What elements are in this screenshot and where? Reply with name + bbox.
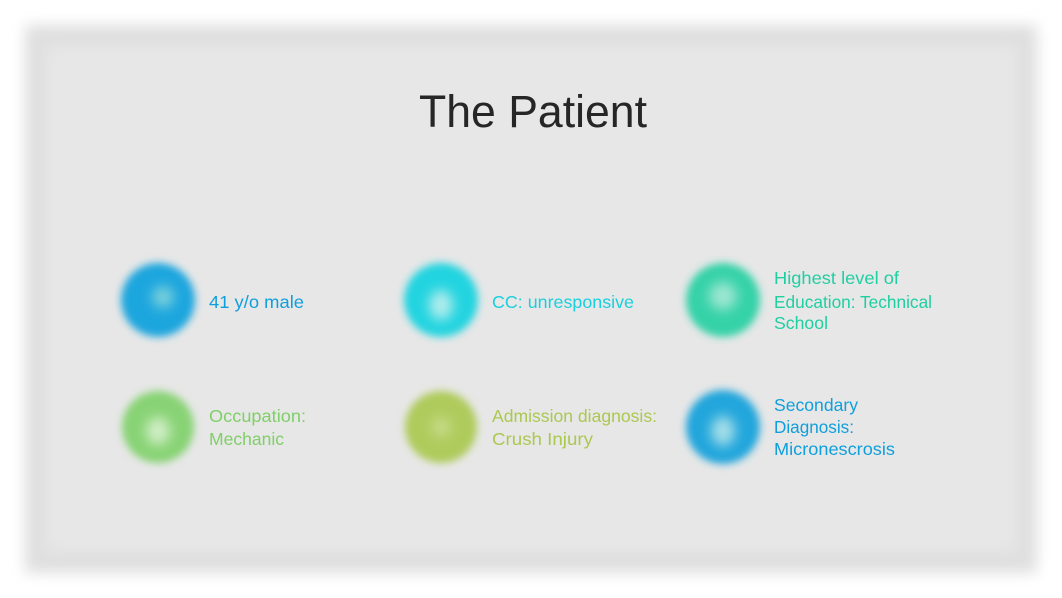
icon: teal circle (686, 263, 760, 337)
label: education text: Education: Technical (774, 292, 932, 312)
label: education text: Highest level of (774, 268, 899, 288)
label: occupation text: Mechanic (209, 429, 284, 449)
label: occupation text: Occupation: (209, 406, 306, 426)
item: chief complaint (404, 263, 634, 337)
item: admission diagnosis (405, 391, 657, 463)
label: occupation text (209, 406, 306, 449)
icon: green circle (122, 391, 194, 463)
label: CC unresponsive: CC: unresponsive (492, 292, 634, 312)
label: admission text: Crush Injury (492, 429, 593, 449)
item: secondary diagnosis (686, 390, 895, 464)
item: age and sex (121, 263, 304, 337)
label: education text: School (774, 313, 828, 333)
icon: olive circle (405, 391, 477, 463)
label: 41 y/o male: 41 y/o male (209, 292, 304, 312)
icon: blue circle (686, 390, 760, 464)
item: occupation (122, 391, 306, 463)
label: secondary diagnosis text (774, 395, 895, 459)
title: The Patient (419, 86, 647, 137)
label: admission text: Admission diagnosis: (492, 406, 657, 426)
label: secondary diagnosis text: Secondary (774, 395, 858, 415)
icon: cyan circle (404, 263, 478, 337)
label: secondary diagnosis text: Micronescrosis (774, 439, 895, 459)
item: education (686, 263, 932, 337)
label: admission text (492, 406, 657, 449)
icon: blue circle (121, 263, 195, 337)
label: secondary diagnosis text: Diagnosis: (774, 417, 854, 437)
label: education text (774, 268, 932, 333)
